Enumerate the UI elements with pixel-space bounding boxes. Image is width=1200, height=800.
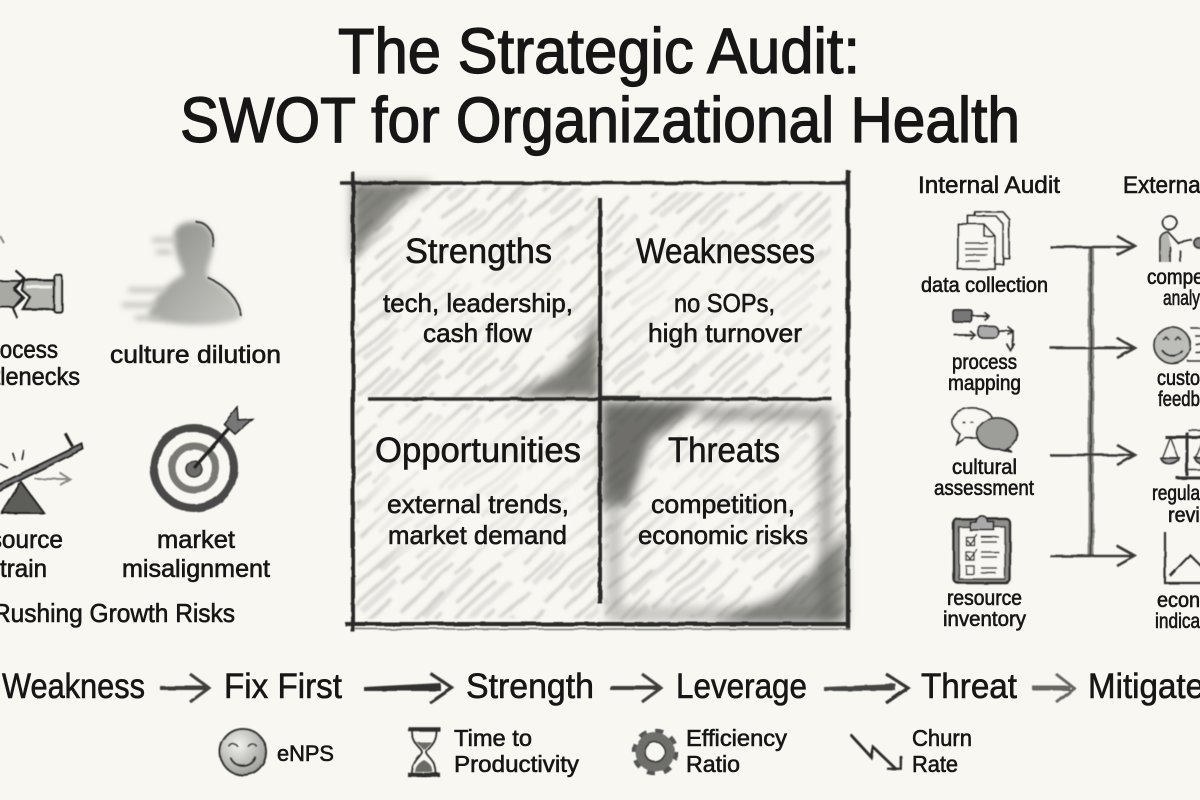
icon: economic chart — [1165, 532, 1200, 583]
arrow — [825, 674, 908, 703]
label: process mapping: mapping — [948, 372, 1021, 395]
step: strength: Strength — [466, 667, 594, 706]
label: economic indicators — [1155, 589, 1200, 633]
label: cultural assessment: cultural — [952, 456, 1017, 479]
heading: internal audit: Internal Audit — [918, 172, 1060, 199]
icon: gear — [634, 731, 676, 773]
label: efficiency ratio: Ratio — [686, 751, 740, 777]
quadrant: strengths — [383, 232, 573, 348]
icon: competitor analysis person — [1160, 216, 1200, 262]
label: resource inventory: resource — [947, 587, 1022, 610]
icon: fading person — [122, 222, 241, 325]
icon: speech bubbles — [952, 408, 1017, 452]
step: fix first: Fix First — [224, 667, 342, 706]
quadrant: threats: Threats — [668, 431, 780, 470]
label: efficiency ratio: Efficiency — [686, 725, 788, 751]
label: time to productivity — [454, 725, 580, 777]
step: leverage: Leverage — [676, 667, 807, 706]
label: process mapping — [948, 351, 1021, 395]
quadrant: strengths: Strengths — [405, 232, 552, 271]
quadrant: opportunities: external trends, — [387, 489, 569, 519]
panel: prioritisation flow — [2, 667, 1200, 706]
icon: clipboard checklist — [954, 516, 1010, 583]
label: resource strain — [0, 526, 63, 583]
arrow — [365, 673, 452, 703]
quadrant: opportunities: market demand — [388, 520, 567, 550]
label: cultural assessment — [934, 456, 1034, 500]
label: data collection: data collection — [921, 274, 1048, 297]
step: weakness: Weakness — [2, 667, 145, 706]
panel: audit columns — [918, 172, 1200, 633]
label: cultural assessment: assessment — [934, 477, 1034, 500]
label: churn rate: Rate — [912, 751, 958, 777]
icon: falling churn arrow — [851, 735, 901, 769]
arrow — [610, 674, 661, 702]
quadrant: weaknesses: no SOPs, — [674, 288, 775, 318]
quadrant: weaknesses: Weaknesses — [636, 232, 815, 271]
icon: seesaw under strain — [0, 433, 83, 513]
label: time to productivity: Time to — [454, 725, 532, 751]
icon: eNPS smile — [220, 729, 266, 775]
label: resource inventory — [943, 587, 1026, 631]
arrow — [1032, 674, 1074, 702]
panel: rushing growth risks — [0, 222, 281, 628]
quadrant: weaknesses: high turnover — [648, 318, 802, 348]
quadrant: opportunities: Opportunities — [375, 431, 581, 470]
title — [180, 15, 1020, 156]
label: competitor analysis — [1147, 266, 1200, 310]
label: churn rate: Churn — [912, 725, 972, 751]
label: market misalignment: misalignment — [122, 555, 270, 583]
step: threat: Threat — [921, 667, 1017, 706]
label: process bottlenecks — [0, 336, 80, 391]
label: process mapping: process — [952, 351, 1017, 374]
quadrant: strengths: tech, leadership, — [383, 288, 573, 318]
arrows: internal to external connectors — [1050, 236, 1135, 566]
label: eNPS: eNPS — [277, 741, 334, 766]
matrix frame — [340, 170, 850, 632]
icon: hourglass — [408, 729, 440, 775]
quadrant: opportunities — [375, 431, 581, 550]
title: The Strategic Audit: — [338, 15, 860, 87]
arrow — [160, 674, 209, 702]
label: efficiency ratio — [686, 725, 788, 777]
title: SWOT for Organizational Health — [180, 84, 1020, 156]
panel: SWOT matrix — [340, 170, 850, 632]
label: churn rate — [912, 725, 972, 777]
quadrant: strengths: cash flow — [423, 318, 532, 348]
label: resource inventory: inventory — [943, 608, 1026, 631]
icon: customer feedback smile — [1154, 327, 1200, 363]
icon: process map — [953, 310, 1015, 351]
icon: broken pipe — [0, 236, 62, 318]
quadrant: threats: competition, — [651, 489, 795, 519]
quadrant: weaknesses — [636, 232, 815, 348]
label: time to productivity: Productivity — [454, 751, 580, 777]
label: customer feedback — [1157, 367, 1200, 411]
icon: document stack — [958, 212, 1009, 269]
icon: target and arrow — [154, 407, 252, 508]
label: market misalignment — [122, 526, 270, 583]
label: market misalignment: market — [157, 526, 235, 554]
panel: health metrics — [220, 725, 972, 777]
label: regulatory review — [1152, 482, 1200, 527]
quadrant: threats — [638, 431, 808, 550]
label: culture dilution: culture dilution — [110, 341, 281, 369]
quadrant: threats: economic risks — [638, 520, 808, 550]
quadrant shading — [352, 182, 846, 622]
icon: regulatory scales — [1161, 430, 1200, 478]
heading: rushing growth risks: Rushing Growth Risks — [0, 598, 235, 628]
